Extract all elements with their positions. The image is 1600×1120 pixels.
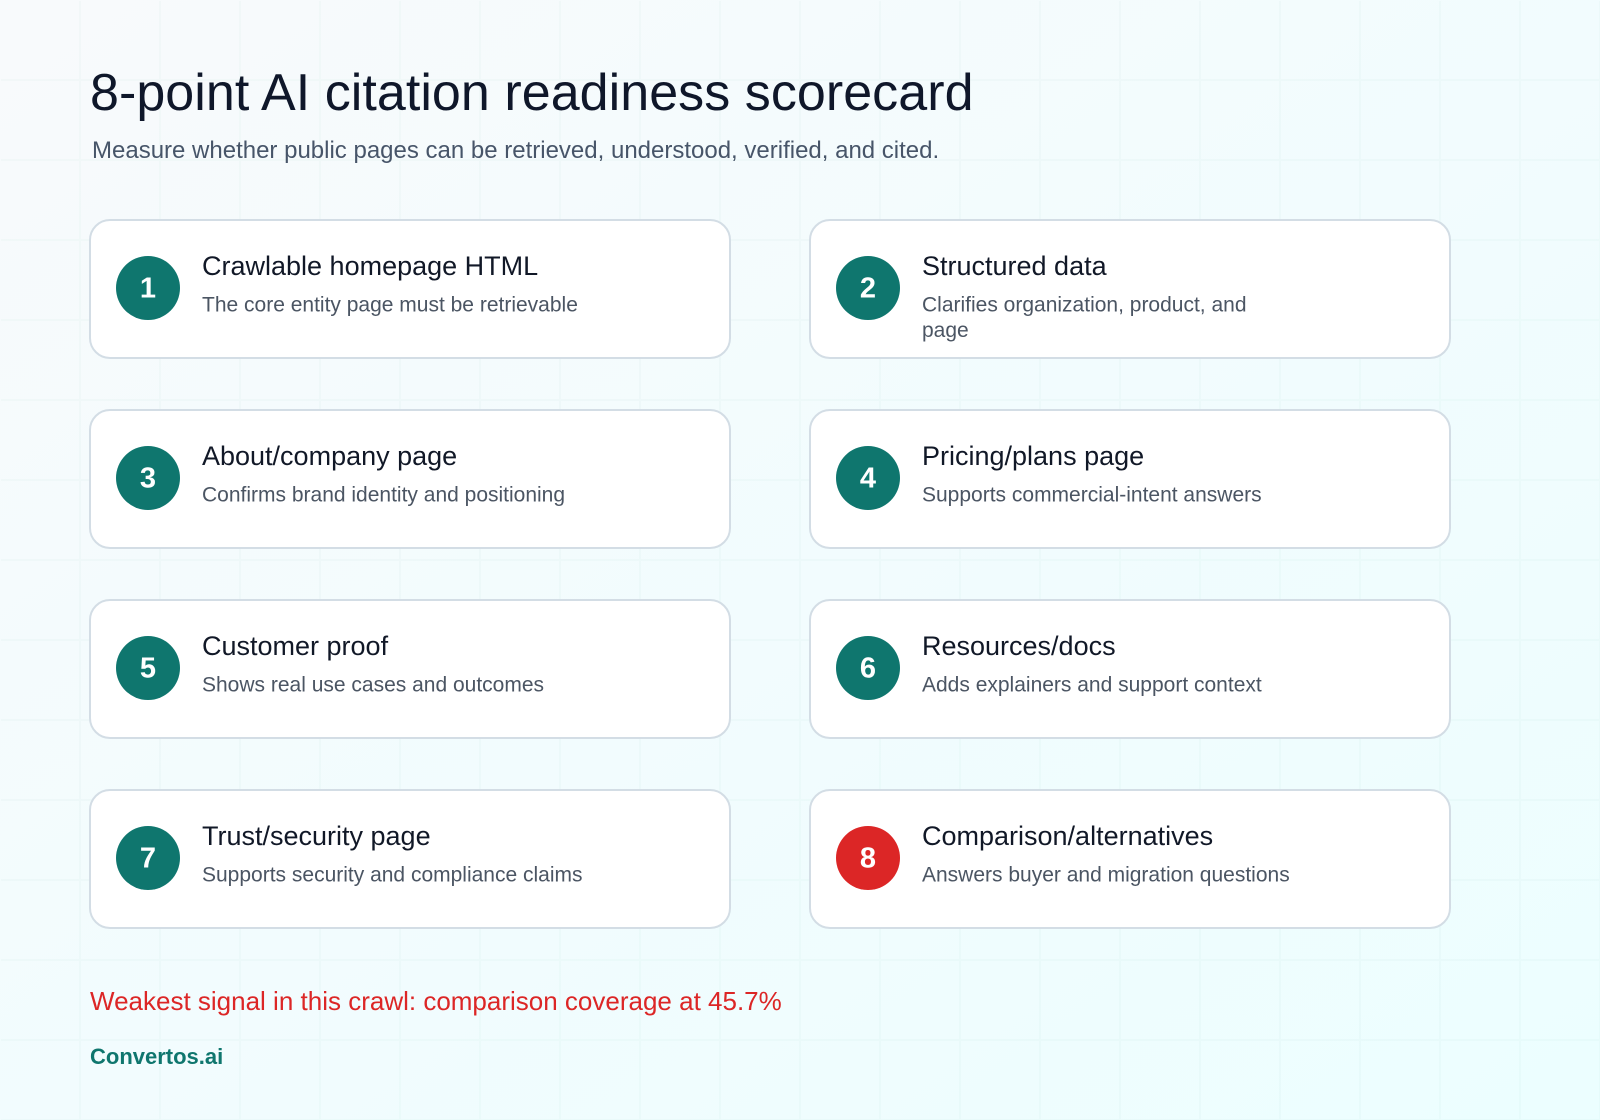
- badge 6: 6: [860, 652, 876, 684]
- card 1: crawlable homepage HTML: [90, 220, 730, 358]
- card 6: resources/docs: [810, 600, 1450, 738]
- badge 1: [116, 256, 180, 320]
- card 7 description: Supports security and compliance claims: [202, 864, 583, 886]
- card 2 description: page: [922, 319, 969, 342]
- badge 8 (weakest signal): 8: [860, 842, 876, 874]
- card 5 description: Shows real use cases and outcomes: [202, 674, 544, 696]
- badge 3: [116, 446, 180, 510]
- card 2 description: Clarifies organization, product, and: [922, 294, 1247, 316]
- card 2: structured data: [810, 220, 1450, 358]
- badge 1: 1: [140, 272, 156, 304]
- card 3 description: Confirms brand identity and positioning: [202, 484, 565, 506]
- card 4: pricing/plans page: [810, 410, 1450, 548]
- title: 8-point AI citation readiness scorecard: [90, 64, 974, 122]
- badge 4: 4: [860, 462, 876, 494]
- card 6 description: Adds explainers and support context: [922, 674, 1262, 696]
- badge 5: [116, 636, 180, 700]
- card 7: trust/security page: [90, 790, 730, 928]
- card 1 description: The core entity page must be retrievable: [202, 294, 578, 316]
- callout: weakest signal: Weakest signal in this crawl: comparison coverage at 45.7%: [90, 986, 782, 1016]
- card 7 heading: Trust/security page: [202, 821, 431, 851]
- card 6 heading: Resources/docs: [922, 631, 1116, 661]
- card 5: customer proof: [90, 600, 730, 738]
- badge 7: 7: [140, 842, 156, 874]
- badge 6: [836, 636, 900, 700]
- card 3: about/company page: [90, 410, 730, 548]
- card 4 heading: Pricing/plans page: [922, 441, 1144, 471]
- card 2 heading: Structured data: [922, 251, 1108, 281]
- card 5 heading: Customer proof: [202, 631, 389, 661]
- badge 2: [836, 256, 900, 320]
- card 8 heading: Comparison/alternatives: [922, 821, 1213, 851]
- badge 7: [116, 826, 180, 890]
- badge 8 (weakest signal): [836, 826, 900, 890]
- badge 4: [836, 446, 900, 510]
- badge 3: 3: [140, 462, 156, 494]
- brand name: Convertos.ai: [90, 1044, 223, 1069]
- badge 2: 2: [860, 272, 876, 304]
- card 3 heading: About/company page: [202, 441, 457, 471]
- card 8 description: Answers buyer and migration questions: [922, 864, 1290, 886]
- subtitle: Measure whether public pages can be retrieved, understood, verified, and cited.: [92, 137, 939, 164]
- card 2 description: [922, 294, 1247, 342]
- card 8: comparison/alternatives: [810, 790, 1450, 928]
- badge 5: 5: [140, 652, 156, 684]
- card 4 description: Supports commercial-intent answers: [922, 484, 1262, 506]
- card 1 heading: Crawlable homepage HTML: [202, 251, 538, 281]
